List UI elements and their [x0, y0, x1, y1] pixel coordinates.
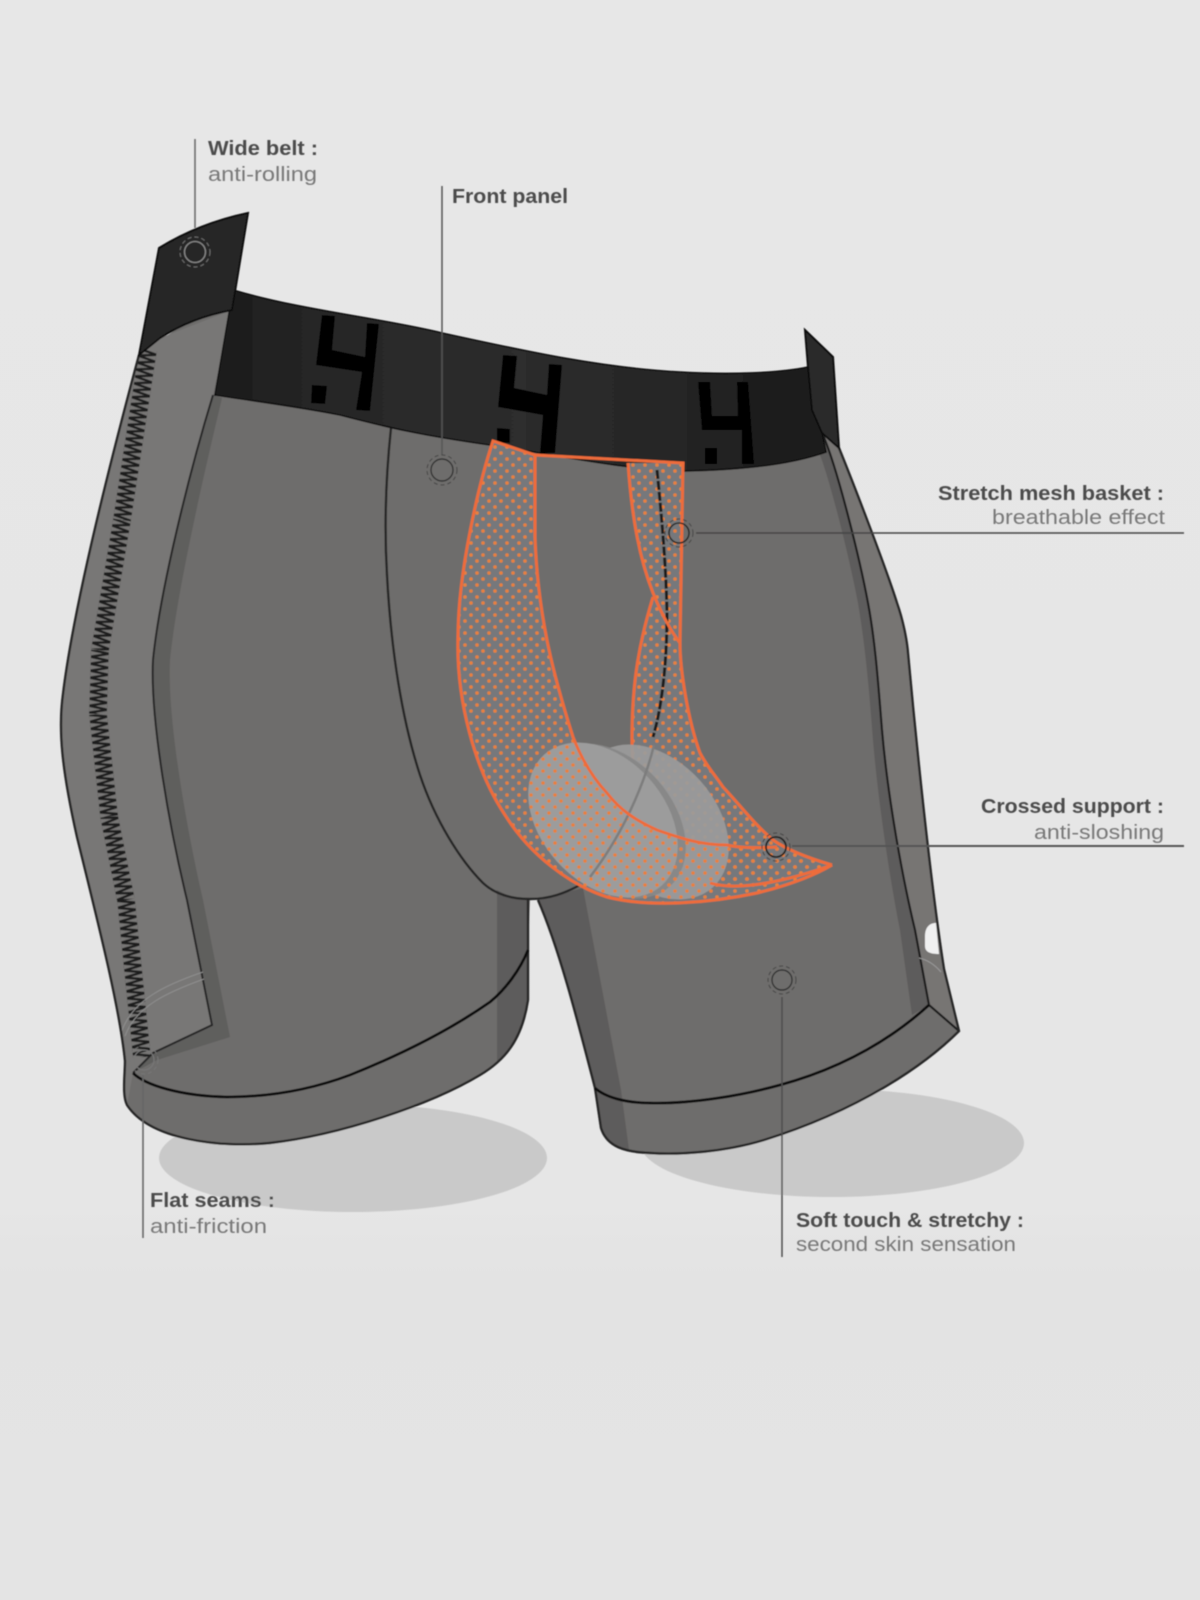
boxer briefs illustration	[61, 213, 959, 1154]
front mesh dots	[458, 441, 832, 903]
right side panel	[823, 435, 959, 1031]
mesh base	[458, 441, 832, 903]
callout: front panel	[427, 186, 568, 485]
callout: soft touch and stretchy	[768, 966, 1024, 1257]
right panel seam line	[823, 435, 959, 1031]
faint seam through shapes	[590, 745, 654, 877]
flat seam zigzag stitching	[89, 349, 157, 1058]
callout: flat seams	[130, 1046, 275, 1238]
left panel shadow band	[133, 395, 230, 1073]
mesh outlines	[458, 441, 832, 903]
callout: wide belt: anti-rolling	[208, 164, 317, 186]
callout: front panel: Front panel	[452, 186, 568, 208]
center dashed seam	[653, 470, 667, 737]
right waistband tab	[805, 330, 839, 448]
callout: crossed support: Crossed support :	[981, 796, 1164, 818]
logo mark 2	[497, 355, 562, 453]
right panel shadow band	[820, 435, 929, 1015]
stretch mesh basket	[458, 441, 832, 929]
front panel seam and crotch	[386, 428, 580, 899]
garment outline	[61, 355, 959, 1154]
left panel seam line	[133, 395, 213, 1073]
callout: flat seams: anti-friction	[150, 1216, 267, 1238]
callout: crossed support	[762, 796, 1184, 861]
back mesh dots	[628, 463, 832, 886]
logo mark 3	[698, 382, 754, 464]
thin stitch on right leg	[919, 958, 941, 972]
callout: soft touch and stretchy: Soft touch & stretchy :	[796, 1210, 1024, 1232]
left waistband tab	[139, 213, 248, 355]
callout: wide belt: Wide belt :	[208, 138, 318, 160]
waistband	[215, 290, 826, 471]
back band edge	[632, 737, 640, 803]
callout: stretch mesh basket: Stretch mesh basket :	[938, 483, 1164, 505]
logo mark 1	[311, 315, 379, 411]
thin double stitch on left leg	[121, 972, 204, 1036]
callout: flat seams: Flat seams :	[150, 1190, 275, 1212]
ground shadows	[159, 1089, 1024, 1212]
callout: stretch mesh basket: breathable effect	[992, 507, 1166, 529]
callout: stretch mesh basket	[665, 483, 1184, 547]
callout: crossed support: anti-sloshing	[1034, 822, 1164, 844]
left side panel	[61, 310, 232, 1105]
testicle shapes	[498, 713, 759, 929]
callout: soft touch and stretchy: second skin sensation	[796, 1234, 1016, 1256]
leg inner shading	[497, 888, 629, 1150]
callout: wide belt	[180, 138, 318, 267]
hem lines	[133, 950, 929, 1103]
care label	[925, 923, 939, 954]
garment body	[61, 290, 959, 1154]
